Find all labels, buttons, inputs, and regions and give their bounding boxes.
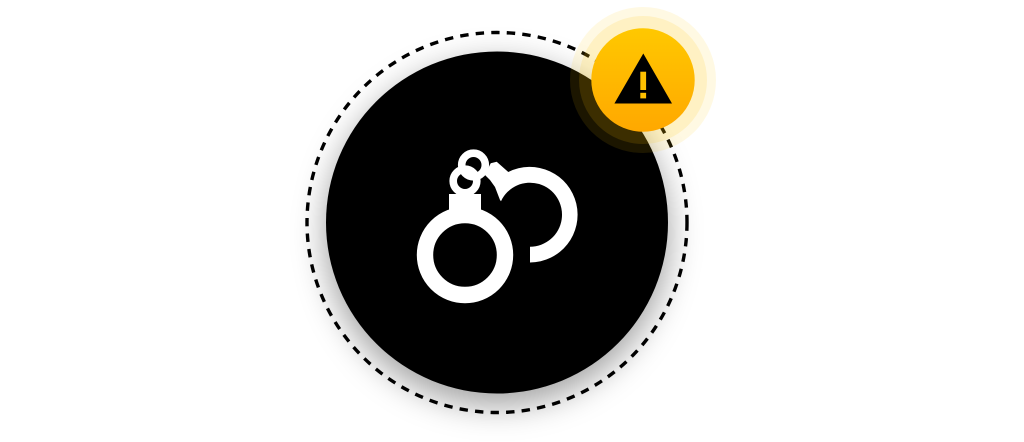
- lower chain link: [453, 169, 477, 193]
- icon: warning triangle: [614, 54, 672, 104]
- amber badge disc: [591, 28, 695, 132]
- inner halo: [579, 16, 707, 144]
- exclamation dot: [640, 93, 646, 98]
- exclamation bar: [640, 72, 646, 90]
- open cuff arc with hinge: [485, 162, 578, 262]
- circle drop shadow: [325, 62, 669, 406]
- cuff neck: [449, 194, 481, 216]
- warning badge: [570, 7, 716, 153]
- black main circle: [326, 52, 668, 394]
- closed cuff ring: [425, 215, 505, 295]
- icon: handcuffs: [425, 153, 578, 295]
- dashed outer ring: [307, 32, 687, 412]
- upper chain link: [462, 153, 485, 177]
- outer halo: [570, 7, 716, 153]
